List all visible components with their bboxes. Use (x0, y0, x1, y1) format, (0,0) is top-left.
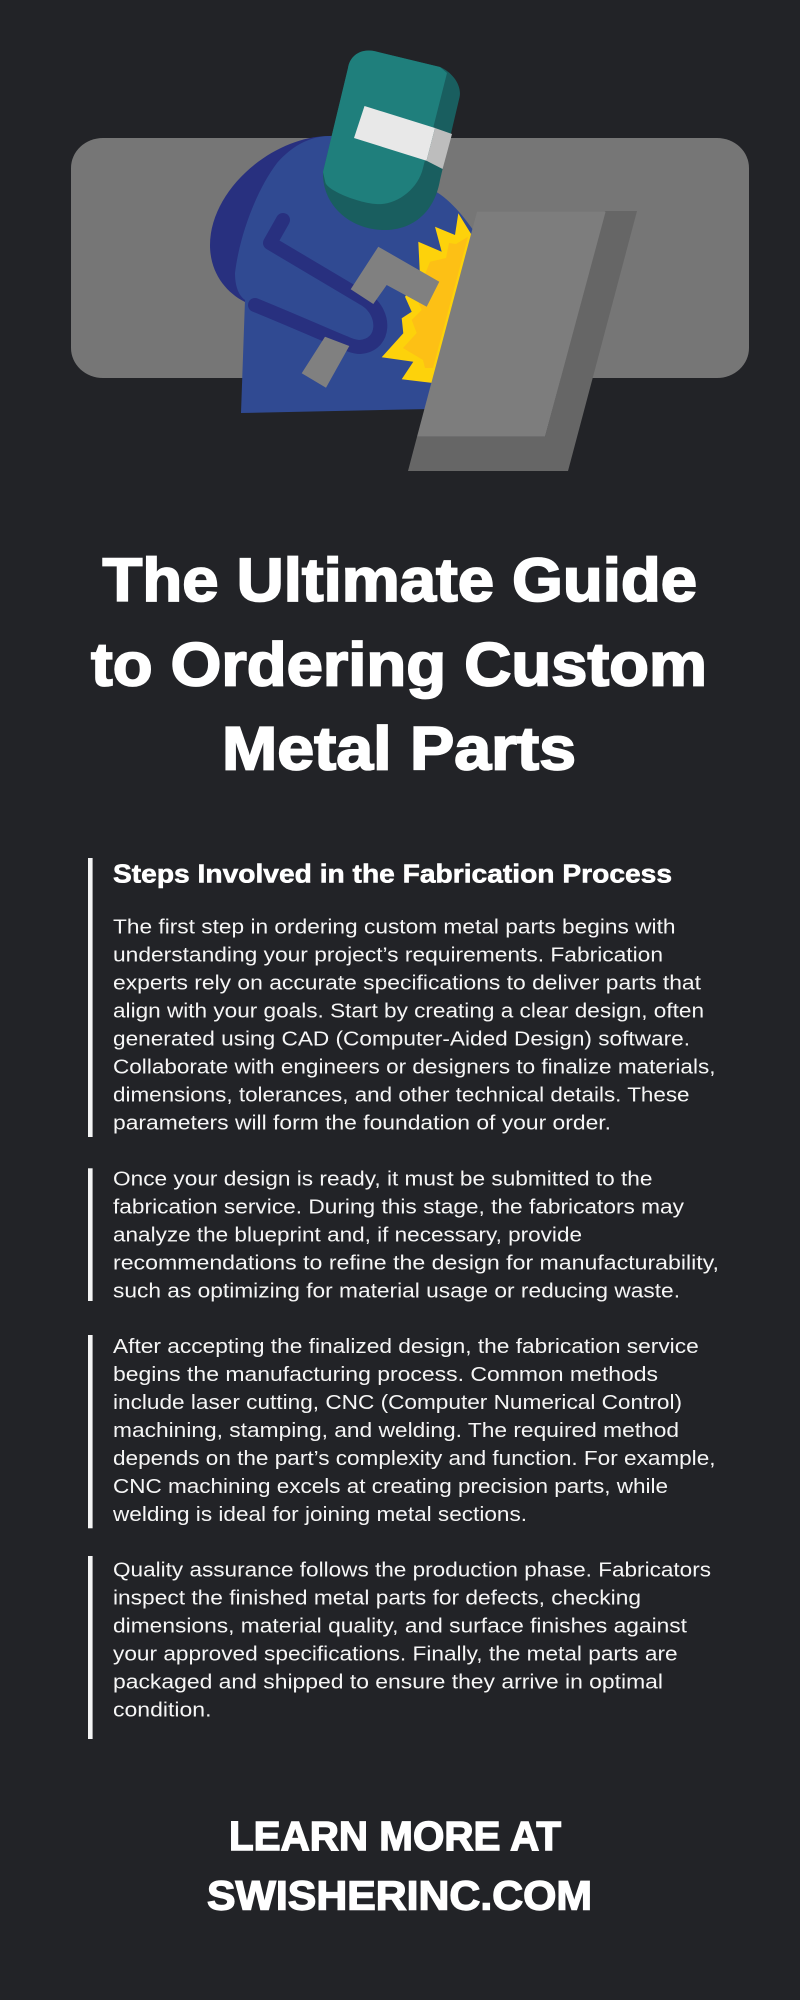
paragraph: manufacturing methods: After accepting the finalized design, the fabrication service (113, 1335, 699, 1358)
paragraph: manufacturing methods: include laser cutting, CNC (Computer Numerical Control) (113, 1391, 682, 1414)
paragraph: submission: Once your design is ready, it must be submitted to the (113, 1168, 652, 1191)
paragraph: design requirements: align with your goals. Start by creating a clear design, often (113, 999, 704, 1022)
paragraph: manufacturing methods: begins the manufacturing process. Common methods (113, 1363, 658, 1386)
paragraph: design requirements: understanding your project’s requirements. Fabrication (113, 944, 663, 966)
title: Metal Parts (222, 714, 576, 782)
paragraph: submission: recommendations to refine the design for manufacturability, (113, 1252, 719, 1275)
paragraph: design requirements (113, 915, 716, 1134)
paragraph: quality and shipping: condition. (113, 1699, 212, 1722)
section 4: quality assurance (88, 1556, 711, 1739)
paragraph: quality and shipping (113, 1559, 711, 1722)
paragraph: submission: such as optimizing for material usage or reducing waste. (113, 1280, 680, 1303)
call to action: LEARN MORE AT (229, 1813, 561, 1859)
paragraph: manufacturing methods (112, 1335, 715, 1526)
paragraph: manufacturing methods: welding is ideal for joining metal sections. (112, 1503, 527, 1526)
paragraph: design requirements: Collaborate with engineers or designers to finalize materials, (113, 1055, 716, 1078)
welding sparks (382, 213, 472, 383)
section heading: Steps Involved in the Fabrication Process (113, 859, 672, 889)
paragraph: design requirements: dimensions, tolerances, and other technical details. These (113, 1083, 690, 1106)
paragraph: manufacturing methods: CNC machining excels at creating precision parts, while (113, 1475, 668, 1498)
title: to Ordering Custom (91, 630, 707, 698)
title (91, 546, 707, 782)
metal sheet (408, 211, 637, 471)
section 3: manufacturing (88, 1335, 716, 1528)
welding torch (302, 247, 439, 388)
paragraph: manufacturing methods: machining, stamping, and welding. The required method (113, 1419, 679, 1442)
paragraph: quality and shipping: dimensions, material quality, and surface finishes against (113, 1615, 687, 1638)
paragraph: design requirements: The first step in ordering custom metal parts begins with (113, 915, 676, 938)
title: The Ultimate Guide (102, 546, 697, 614)
paragraph: design requirements: experts rely on accurate specifications to deliver parts that (113, 971, 701, 994)
section 1: steps heading and paragraph (88, 858, 716, 1137)
paragraph: design requirements: generated using CAD (Computer-Aided Design) software. (113, 1027, 690, 1050)
section 2: design submission (88, 1168, 719, 1303)
paragraph: submission (113, 1168, 719, 1303)
paragraph: manufacturing methods: depends on the part’s complexity and function. For example, (113, 1447, 716, 1470)
paragraph: submission: analyze the blueprint and, if necessary, provide (113, 1224, 582, 1247)
paragraph: quality and shipping: inspect the finished metal parts for defects, checking (113, 1587, 641, 1610)
paragraph: quality and shipping: your approved specifications. Finally, the metal parts are (113, 1643, 678, 1666)
paragraph: design requirements: parameters will form the foundation of your order. (113, 1111, 611, 1134)
paragraph: quality and shipping: Quality assurance follows the production phase. Fabricators (113, 1559, 711, 1582)
paragraph: submission: fabrication service. During this stage, the fabricators may (113, 1196, 685, 1219)
call to action: SWISHERINC.COM (207, 1872, 592, 1918)
welder body (210, 136, 480, 413)
backdrop panel (71, 138, 749, 378)
welding helmet (323, 50, 460, 230)
illustration: welder at work (71, 50, 749, 471)
call to action (207, 1813, 592, 1918)
paragraph: quality and shipping: packaged and shipped to ensure they arrive in optimal (113, 1671, 663, 1694)
